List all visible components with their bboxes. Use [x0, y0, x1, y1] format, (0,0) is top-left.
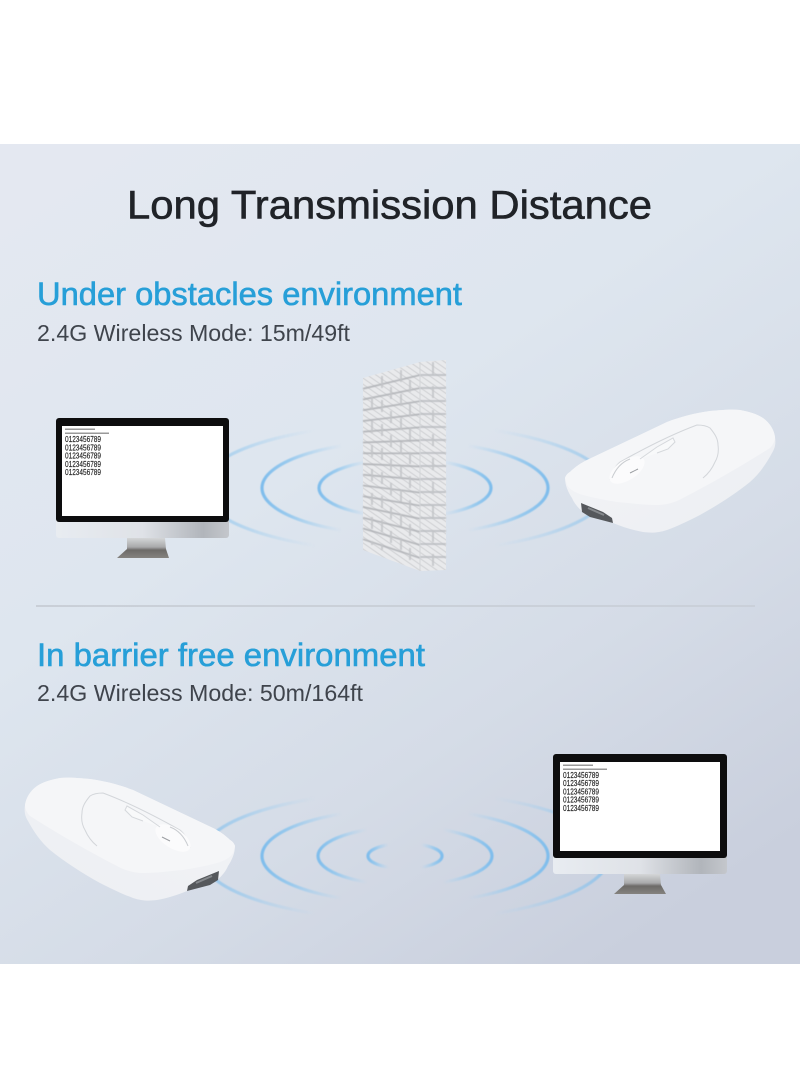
- monitor: bottom: 0123456789: [563, 779, 599, 788]
- monitor: top: [56, 418, 229, 558]
- panel: background: [0, 144, 800, 964]
- monitor: bottom: [553, 754, 727, 894]
- icon: mouse top: [565, 410, 775, 533]
- monitor: top: 0123456789: [65, 452, 101, 461]
- text: obstacle range: 2.4G Wireless Mode: 15m/49ft: [37, 320, 351, 346]
- monitor: bottom: 0123456789: [563, 804, 599, 813]
- monitor: top: 0123456789: [65, 460, 101, 469]
- title: Long Transmission Distance: [127, 184, 652, 228]
- text: barrier free range: 2.4G Wireless Mode: 50m/164ft: [37, 680, 364, 706]
- monitor: top: 0123456789: [65, 468, 101, 477]
- monitor: bottom: 0123456789: [563, 771, 599, 780]
- heading: under obstacles: Under obstacles environment: [37, 276, 462, 312]
- icon: mouse bottom: [25, 778, 235, 901]
- monitor: top: 0123456789: [65, 443, 101, 452]
- signal waves: top: [201, 424, 609, 552]
- monitor: top: 0123456789: [65, 435, 101, 444]
- divider: [36, 606, 755, 607]
- monitor: bottom: 0123456789: [563, 796, 599, 805]
- icon: brick wall: [363, 360, 446, 571]
- heading: barrier free: In barrier free environment: [37, 637, 425, 673]
- monitor: bottom: 0123456789: [563, 787, 599, 796]
- signal waves: bottom: [201, 792, 609, 920]
